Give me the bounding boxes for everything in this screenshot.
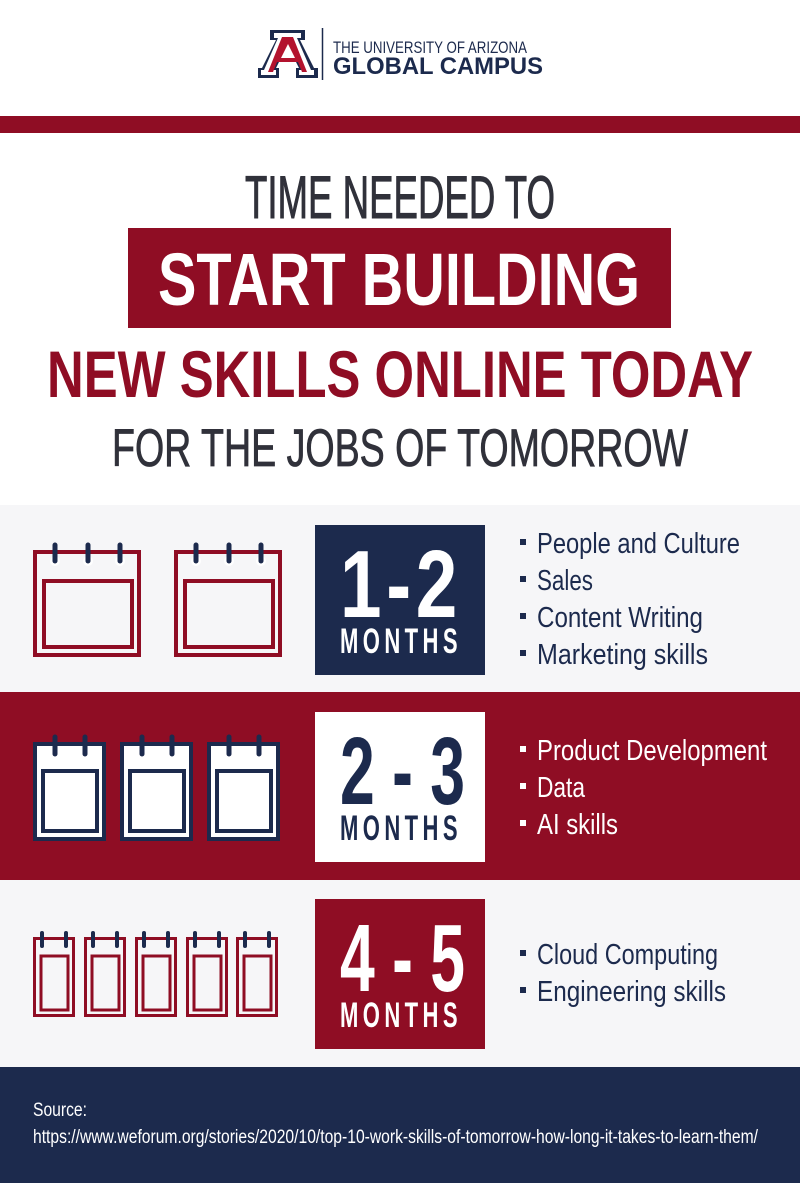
duration box 2-3: 2 - 3 — [340, 718, 465, 825]
skills list 3 — [520, 939, 726, 1008]
logo text: THE UNIVERSITY OF ARIZONA — [333, 38, 528, 57]
title: TIME NEEDED TO — [245, 164, 555, 231]
title highlight box — [128, 228, 671, 328]
icon: three calendars — [35, 737, 278, 839]
skills list 1: Marketing skills — [537, 639, 708, 671]
skills list 3: Cloud Computing — [537, 939, 718, 971]
panel: 1-2 months — [0, 505, 800, 692]
duration box 2-3: MONTHS — [340, 809, 462, 848]
logo — [258, 28, 543, 80]
title highlight box: START BUILDING — [158, 238, 640, 321]
title — [47, 164, 753, 478]
skills list 1: Sales — [537, 565, 593, 597]
skills list 3: Engineering skills — [537, 976, 726, 1008]
footer: source: Source: — [33, 1100, 87, 1121]
duration box 4-5 — [315, 899, 485, 1049]
logo text: GLOBAL CAMPUS — [333, 53, 543, 80]
icon: five calendars — [34, 933, 276, 1016]
duration box 4-5: MONTHS — [340, 996, 462, 1035]
duration box 1-2 — [315, 525, 485, 675]
footer: source — [0, 1067, 800, 1183]
duration box 4-5: 4 - 5 — [340, 905, 465, 1012]
duration box 2-3 — [315, 712, 485, 862]
skills list 2: Data — [537, 772, 586, 804]
skills list 1: Content Writing — [537, 602, 703, 634]
skills list 2 — [520, 735, 767, 841]
icon: block A — [258, 30, 318, 78]
panel: 2-3 months — [0, 692, 800, 880]
skills list 1 — [520, 528, 740, 671]
panel: 4-5 months — [0, 880, 800, 1067]
skills list 2: AI skills — [537, 809, 618, 841]
logo text — [333, 38, 543, 80]
duration box 1-2: 1-2 — [340, 531, 462, 638]
icon: two calendars — [35, 545, 280, 655]
duration box 1-2: MONTHS — [340, 622, 462, 661]
red stripe — [0, 116, 800, 133]
skills list 1: People and Culture — [537, 528, 740, 560]
